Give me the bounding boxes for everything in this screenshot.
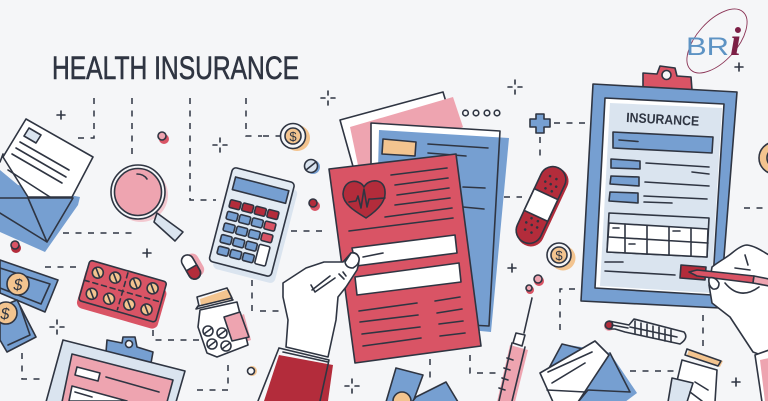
panel: pink back document — [340, 92, 463, 172]
icon: medicine jar — [196, 288, 251, 357]
icon: bottom-left clipboard — [46, 337, 185, 401]
heading: INSURANCE: INSURANCE — [626, 110, 700, 129]
icon: money bills: $ — [0, 306, 11, 323]
logo: BRi — [676, 0, 758, 83]
icon: dollar coin — [280, 124, 310, 151]
panel: blue document — [371, 123, 509, 332]
cuff — [755, 350, 768, 401]
icon: thermometer — [604, 319, 686, 344]
icon: edge coin — [759, 142, 768, 174]
icon: envelope with letter — [0, 119, 93, 252]
sleeve — [258, 348, 333, 401]
panel: insurance clipboard — [581, 66, 737, 308]
icon: bottom-right envelope — [540, 341, 637, 401]
icon: calculator — [207, 167, 300, 284]
icon: bottom money — [386, 368, 458, 401]
icon: bandage — [511, 162, 573, 251]
logo: BRi: BR — [686, 33, 729, 61]
icon: medical cross — [530, 114, 550, 133]
icon: small pill dots — [11, 132, 320, 376]
icon: coin and pills near syringe: $ — [555, 248, 563, 263]
icon: hand with pen — [689, 245, 768, 401]
title: HEALTH INSURANCE — [52, 50, 299, 86]
logo: BRi: i — [730, 19, 741, 64]
icon: heart with pulse — [343, 181, 385, 218]
icon: dollar coin: $ — [289, 129, 297, 144]
icon: money bills — [0, 260, 58, 352]
panel: red health document — [329, 154, 481, 363]
icon: coin and pills near syringe — [526, 243, 576, 294]
decorative dots row — [463, 110, 500, 116]
pen — [689, 270, 768, 286]
icon: money bills: $ — [13, 277, 24, 294]
table — [607, 213, 709, 257]
icon: capsule — [179, 250, 207, 281]
icon: syringe — [497, 298, 532, 401]
icon: hand holding document — [258, 253, 359, 401]
icon: bottom-right jar — [668, 349, 723, 401]
icon: blister pill pack — [76, 260, 170, 330]
icon: magnifying glass — [111, 165, 183, 241]
